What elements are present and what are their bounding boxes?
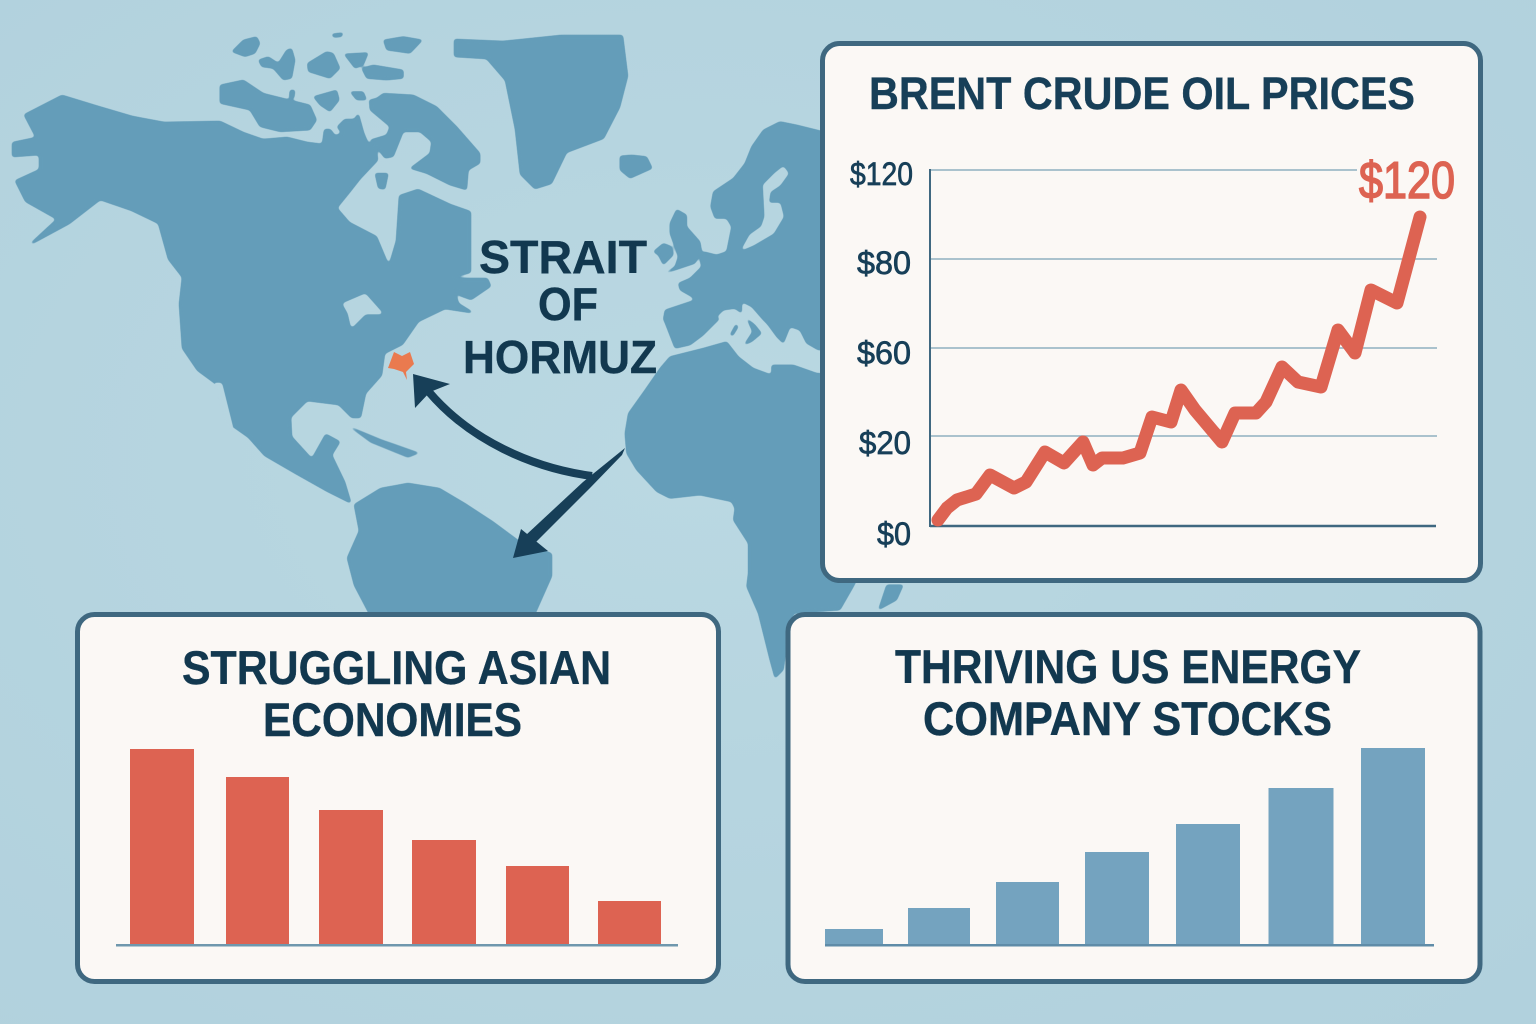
heading: thriving us energy company stocks: [895, 640, 1361, 745]
panel: struggling asian economies: [78, 614, 718, 982]
axis labels: $80: [857, 245, 911, 281]
inland waters: [215, 167, 788, 432]
price callout: $120: [1359, 152, 1455, 210]
africa: [625, 342, 903, 678]
southern europe: [663, 318, 827, 352]
heading: thriving us energy company stocks: THRIVING US ENERGY: [895, 640, 1361, 693]
north america: [13, 96, 471, 502]
great lakes: [344, 295, 381, 326]
axis labels: $60: [857, 335, 911, 371]
madagascar: [878, 585, 903, 610]
heading: struggling asian economies: ECONOMIES: [263, 693, 522, 746]
heading: brent crude oil prices: BRENT CRUDE OIL PRICES: [869, 68, 1415, 119]
heading: struggling asian economies: STRUGGLING ASIAN: [182, 641, 611, 694]
world map: [13, 33, 903, 678]
baltic sea: [742, 167, 788, 250]
line chart: [850, 152, 1455, 552]
axis labels: $20: [859, 425, 911, 461]
icon: strait location marker: [388, 352, 414, 380]
arctic islands: [220, 33, 480, 190]
panel: thriving us energy company stocks: [788, 614, 1480, 982]
bar chart: declining: [116, 749, 678, 946]
axis labels: [850, 156, 913, 552]
newfoundland: [447, 277, 490, 299]
bar chart: rising: [825, 748, 1434, 946]
arrow: to south america: [513, 448, 625, 558]
title: strait of hormuz: STRAIT: [479, 231, 647, 283]
south america: [348, 484, 551, 625]
caribbean islands: [352, 428, 418, 457]
price line: [938, 217, 1420, 520]
greenland: [455, 36, 627, 188]
axis labels: $120: [850, 156, 913, 192]
title: strait of hormuz: [463, 231, 657, 383]
europe and iceland: [620, 122, 830, 350]
gulf of california: [215, 384, 233, 432]
heading: thriving us energy company stocks: COMPANY STOCKS: [923, 692, 1332, 745]
arrow: to strait marker: [413, 374, 592, 476]
title: strait of hormuz: HORMUZ: [463, 331, 657, 383]
heading: struggling asian economies: [182, 641, 611, 746]
title: strait of hormuz: OF: [538, 278, 598, 330]
axis labels: $0: [877, 516, 911, 552]
panel: brent crude oil prices: [822, 44, 1480, 580]
